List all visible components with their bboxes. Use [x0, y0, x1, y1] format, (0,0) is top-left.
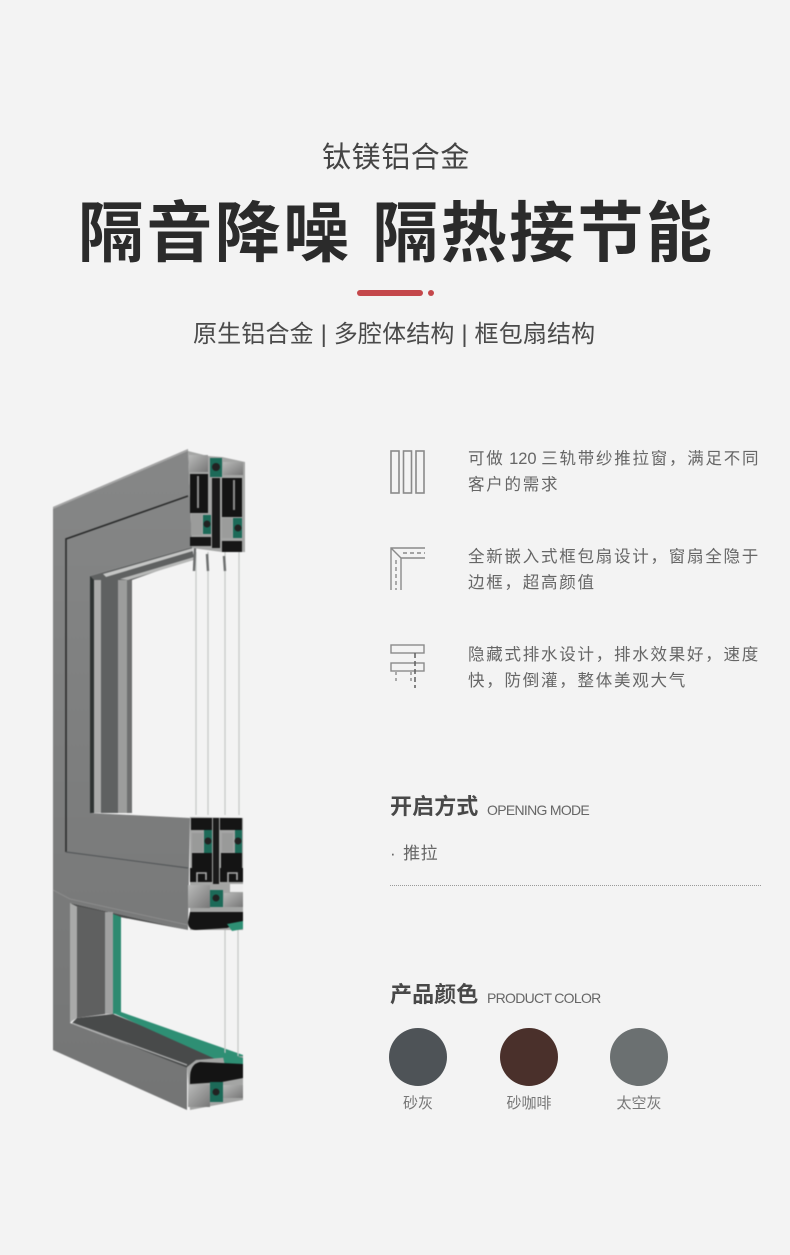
upper soffit — [90, 547, 194, 580]
icon: three tracks — [390, 450, 425, 494]
feature text 3 — [468, 646, 760, 690]
top subtitle: 钛镁铝合金 — [322, 142, 470, 174]
swatch: sand gray — [389, 1028, 447, 1086]
opening mode english label: OPENING MODE — [487, 802, 589, 818]
opening mode heading: 开启方式 — [390, 794, 478, 819]
red accent bar — [357, 290, 434, 296]
upper sash recess line — [66, 496, 188, 852]
feature text 3: 快，防倒灌，整体美观大气 — [468, 672, 687, 690]
feature text 1: 客户的需求 — [468, 476, 559, 494]
label: sand coffee: 砂咖啡 — [506, 1095, 552, 1112]
label: space gray: 太空灰 — [616, 1095, 662, 1112]
top frame cross-section — [188, 451, 245, 552]
main title: 隔音降噪 隔热接节能 — [78, 196, 714, 270]
icon: embedded frame corner — [390, 547, 425, 590]
feature text 1 — [468, 450, 760, 494]
swatch: sand coffee — [500, 1028, 558, 1086]
frame front face — [53, 449, 192, 1110]
upper reveal — [90, 576, 94, 813]
product color heading: 产品颜色 — [390, 982, 478, 1007]
feature text 1: 可做 120 三轨带纱推拉窗，满足不同 — [468, 450, 760, 468]
product color english label: PRODUCT COLOR — [487, 990, 601, 1006]
feature text 2 — [468, 548, 760, 592]
lower opening — [70, 903, 77, 1023]
middle rail cross-section — [188, 817, 243, 931]
swatch: space gray — [610, 1028, 668, 1086]
tagline: 原生铝合金 | 多腔体结构 | 框包扇结构 — [193, 321, 595, 348]
glass lines — [194, 548, 239, 1056]
opening mode value: · 推拉 — [390, 844, 438, 863]
feature text 2: 全新嵌入式框包扇设计，窗扇全隐于 — [468, 548, 760, 566]
label: sand gray: 砂灰 — [403, 1095, 433, 1112]
feature text 3: 隐藏式排水设计，排水效果好，速度 — [468, 646, 760, 664]
feature text 2: 边框，超高颜值 — [468, 574, 596, 592]
icon: concealed drainage — [390, 644, 425, 688]
bottom frame cross-section — [187, 1052, 243, 1110]
